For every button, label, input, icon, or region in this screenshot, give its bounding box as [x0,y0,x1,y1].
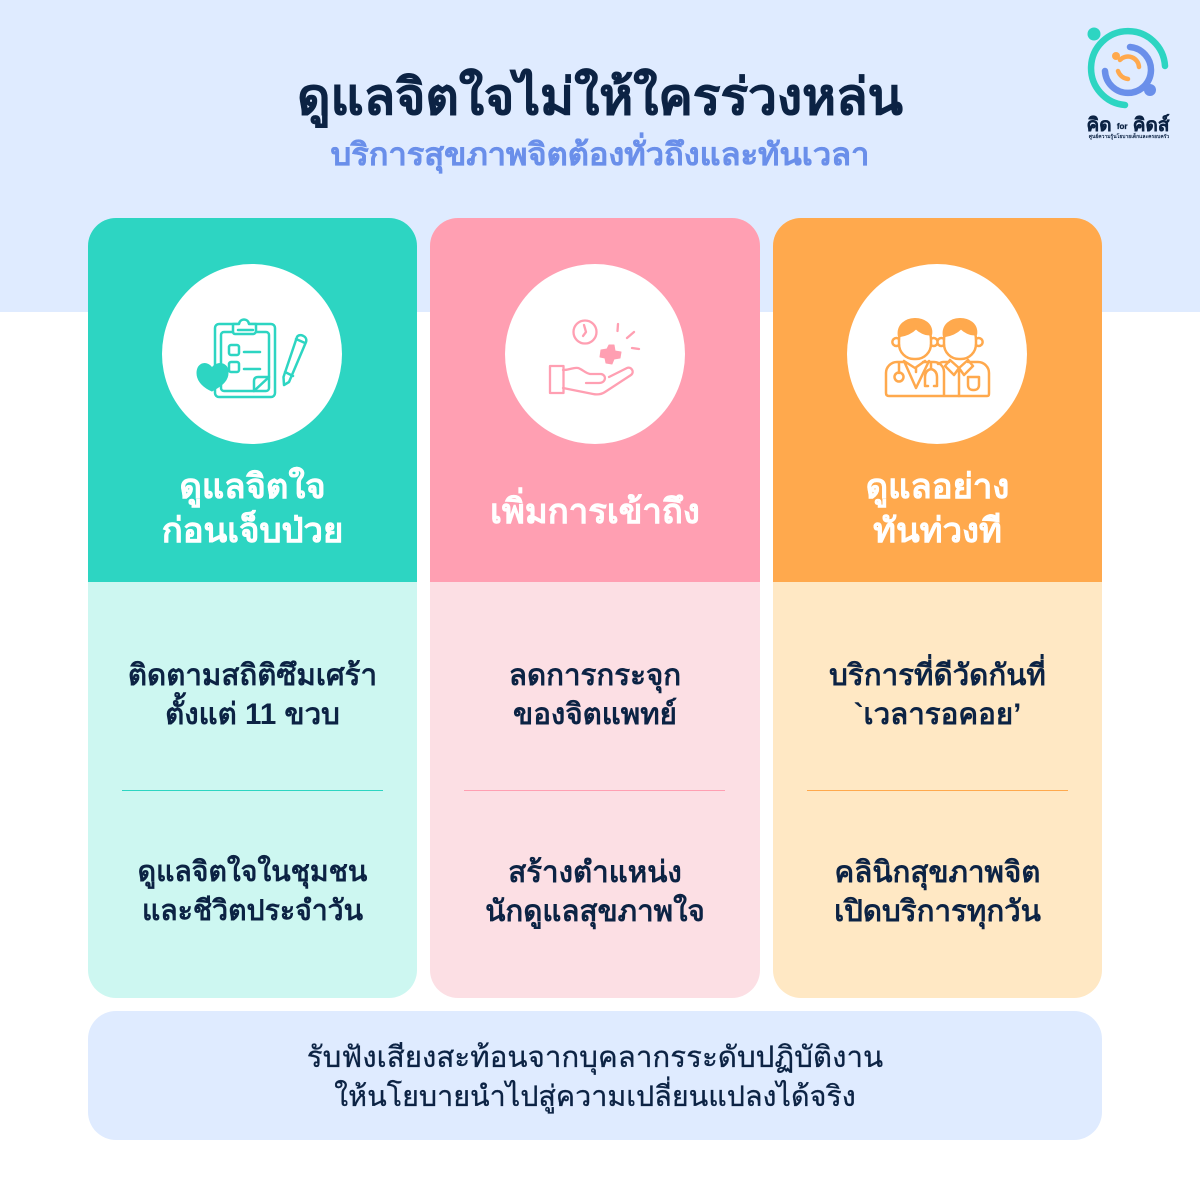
panel: orange column [773,218,1102,998]
heading: orange [866,468,1009,550]
text: pink 2: นักดูแลสุขภาพใจ [485,895,705,928]
panel: teal column [88,218,417,998]
logo [1087,28,1170,140]
text: pink 2: สร้างตำแหน่ง [508,856,682,889]
text: orange 1: บริการที่ดีวัดกันที่ [829,659,1046,692]
heading: teal: ดูแลจิตใจ [179,468,326,506]
header background band [0,0,1200,312]
text: teal 1 [128,659,377,731]
subtitle: บริการสุขภาพจิตต้องทั่วถึงและทันเวลา [331,137,869,172]
icon circle: pink [505,264,685,444]
icon circle: teal [162,264,342,444]
icon: hand with clock and medical cross [548,319,640,396]
text: orange 2: เปิดบริการทุกวัน [834,895,1041,928]
text: bottom note: รับฟังเสียงสะท้อนจากบุคลากรระดับปฏิบัติงาน [307,1041,883,1074]
title: ดูแลจิตใจไม่ให้ใครร่วงหล่น [297,69,903,125]
text: teal 1: ติดตามสถิติซึมเศร้า [128,659,377,692]
logo: คิด for คิดส์ [1087,115,1169,136]
text: teal 1: ตั้งแต่ 11 ขวบ [165,698,340,731]
text: orange 1 [829,654,1046,731]
text: teal 2: และชีวิตประจำวัน [142,895,363,927]
icon: two doctors [884,318,990,398]
text: pink 1: ของจิตแพทย์ [513,698,677,731]
panel: bottom note [88,1011,1102,1140]
text: orange 2 [834,856,1041,930]
text: pink 1 [509,659,681,731]
heading: orange: ดูแลอย่าง [866,468,1009,506]
icon circle: orange [847,264,1027,444]
panel: pink column [430,218,760,998]
heading: orange: ทันท่วงที [873,512,1002,550]
text: pink 2 [485,856,705,930]
heading: teal: ก่อนเจ็บป่วย [162,512,343,550]
logo: ศูนย์ความรู้นโยบายเด็กและครอบครัว [1089,134,1169,140]
text: teal 2 [138,854,368,927]
text: bottom note [307,1041,883,1114]
text: teal 2: ดูแลจิตใจในชุมชน [138,856,367,888]
text: pink 1: ลดการกระจุก [509,659,681,692]
text: bottom note: ให้นโยบายนำไปสู่ความเปลี่ยนแปลงได้จริง [334,1081,856,1113]
heading: teal [162,466,343,550]
heading: pink: เพิ่มการเข้าถึง [490,493,700,531]
text: orange 2: คลินิกสุขภาพจิต [835,856,1040,889]
text: orange 1: `เวลารอคอย’ [854,698,1021,731]
icon: clipboard, heart and pencil [196,318,308,398]
